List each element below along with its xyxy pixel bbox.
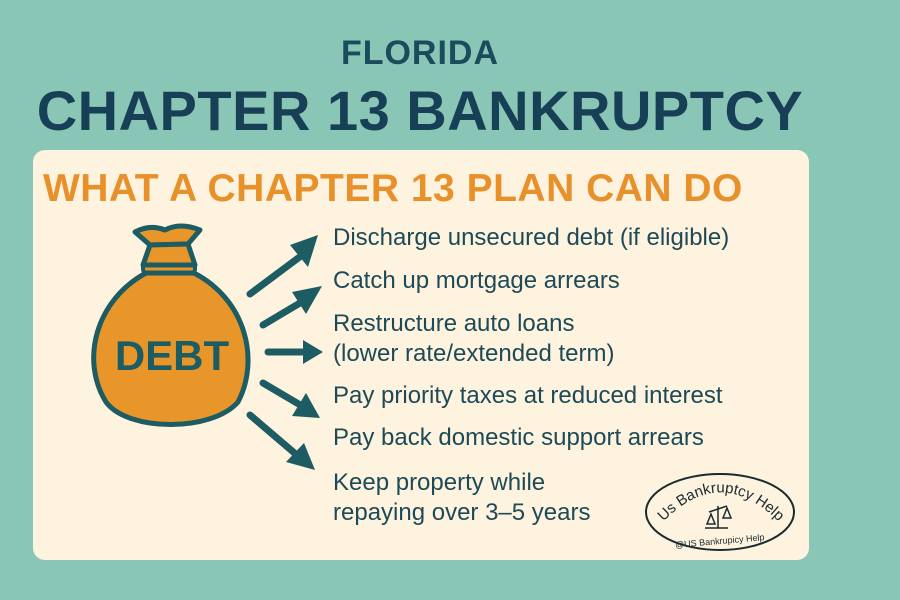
icon: debt bag: DEBT	[115, 332, 230, 379]
text: Catch up mortgage arrears	[333, 267, 620, 294]
arrows	[246, 235, 323, 470]
text: repaying over 3–5 years	[333, 499, 590, 526]
heading: WHAT A CHAPTER 13 PLAN CAN DO	[43, 167, 743, 210]
text: Keep property while	[333, 469, 545, 496]
panel: plan	[33, 150, 809, 560]
icon: debt bag	[91, 224, 251, 427]
list items: Discharge unsecured debt (if eligible)	[333, 224, 729, 251]
text: Restructure auto loans	[333, 310, 574, 337]
text: Pay back domestic support arrears	[333, 424, 704, 451]
logo: Us Bankruptcy Help stamp	[645, 473, 795, 551]
logo: Us Bankruptcy Help stamp: Us Bankruptcy Help	[657, 484, 783, 520]
title: Chapter 13 Bankruptcy: CHAPTER 13 BANKRUPTCY	[37, 79, 803, 142]
title: Florida: FLORIDA	[341, 34, 499, 72]
text: (lower rate/extended term)	[333, 340, 614, 367]
text: Pay priority taxes at reduced interest	[333, 382, 723, 409]
logo: Us Bankruptcy Help stamp: @US Bankrupicy Help	[675, 532, 765, 550]
